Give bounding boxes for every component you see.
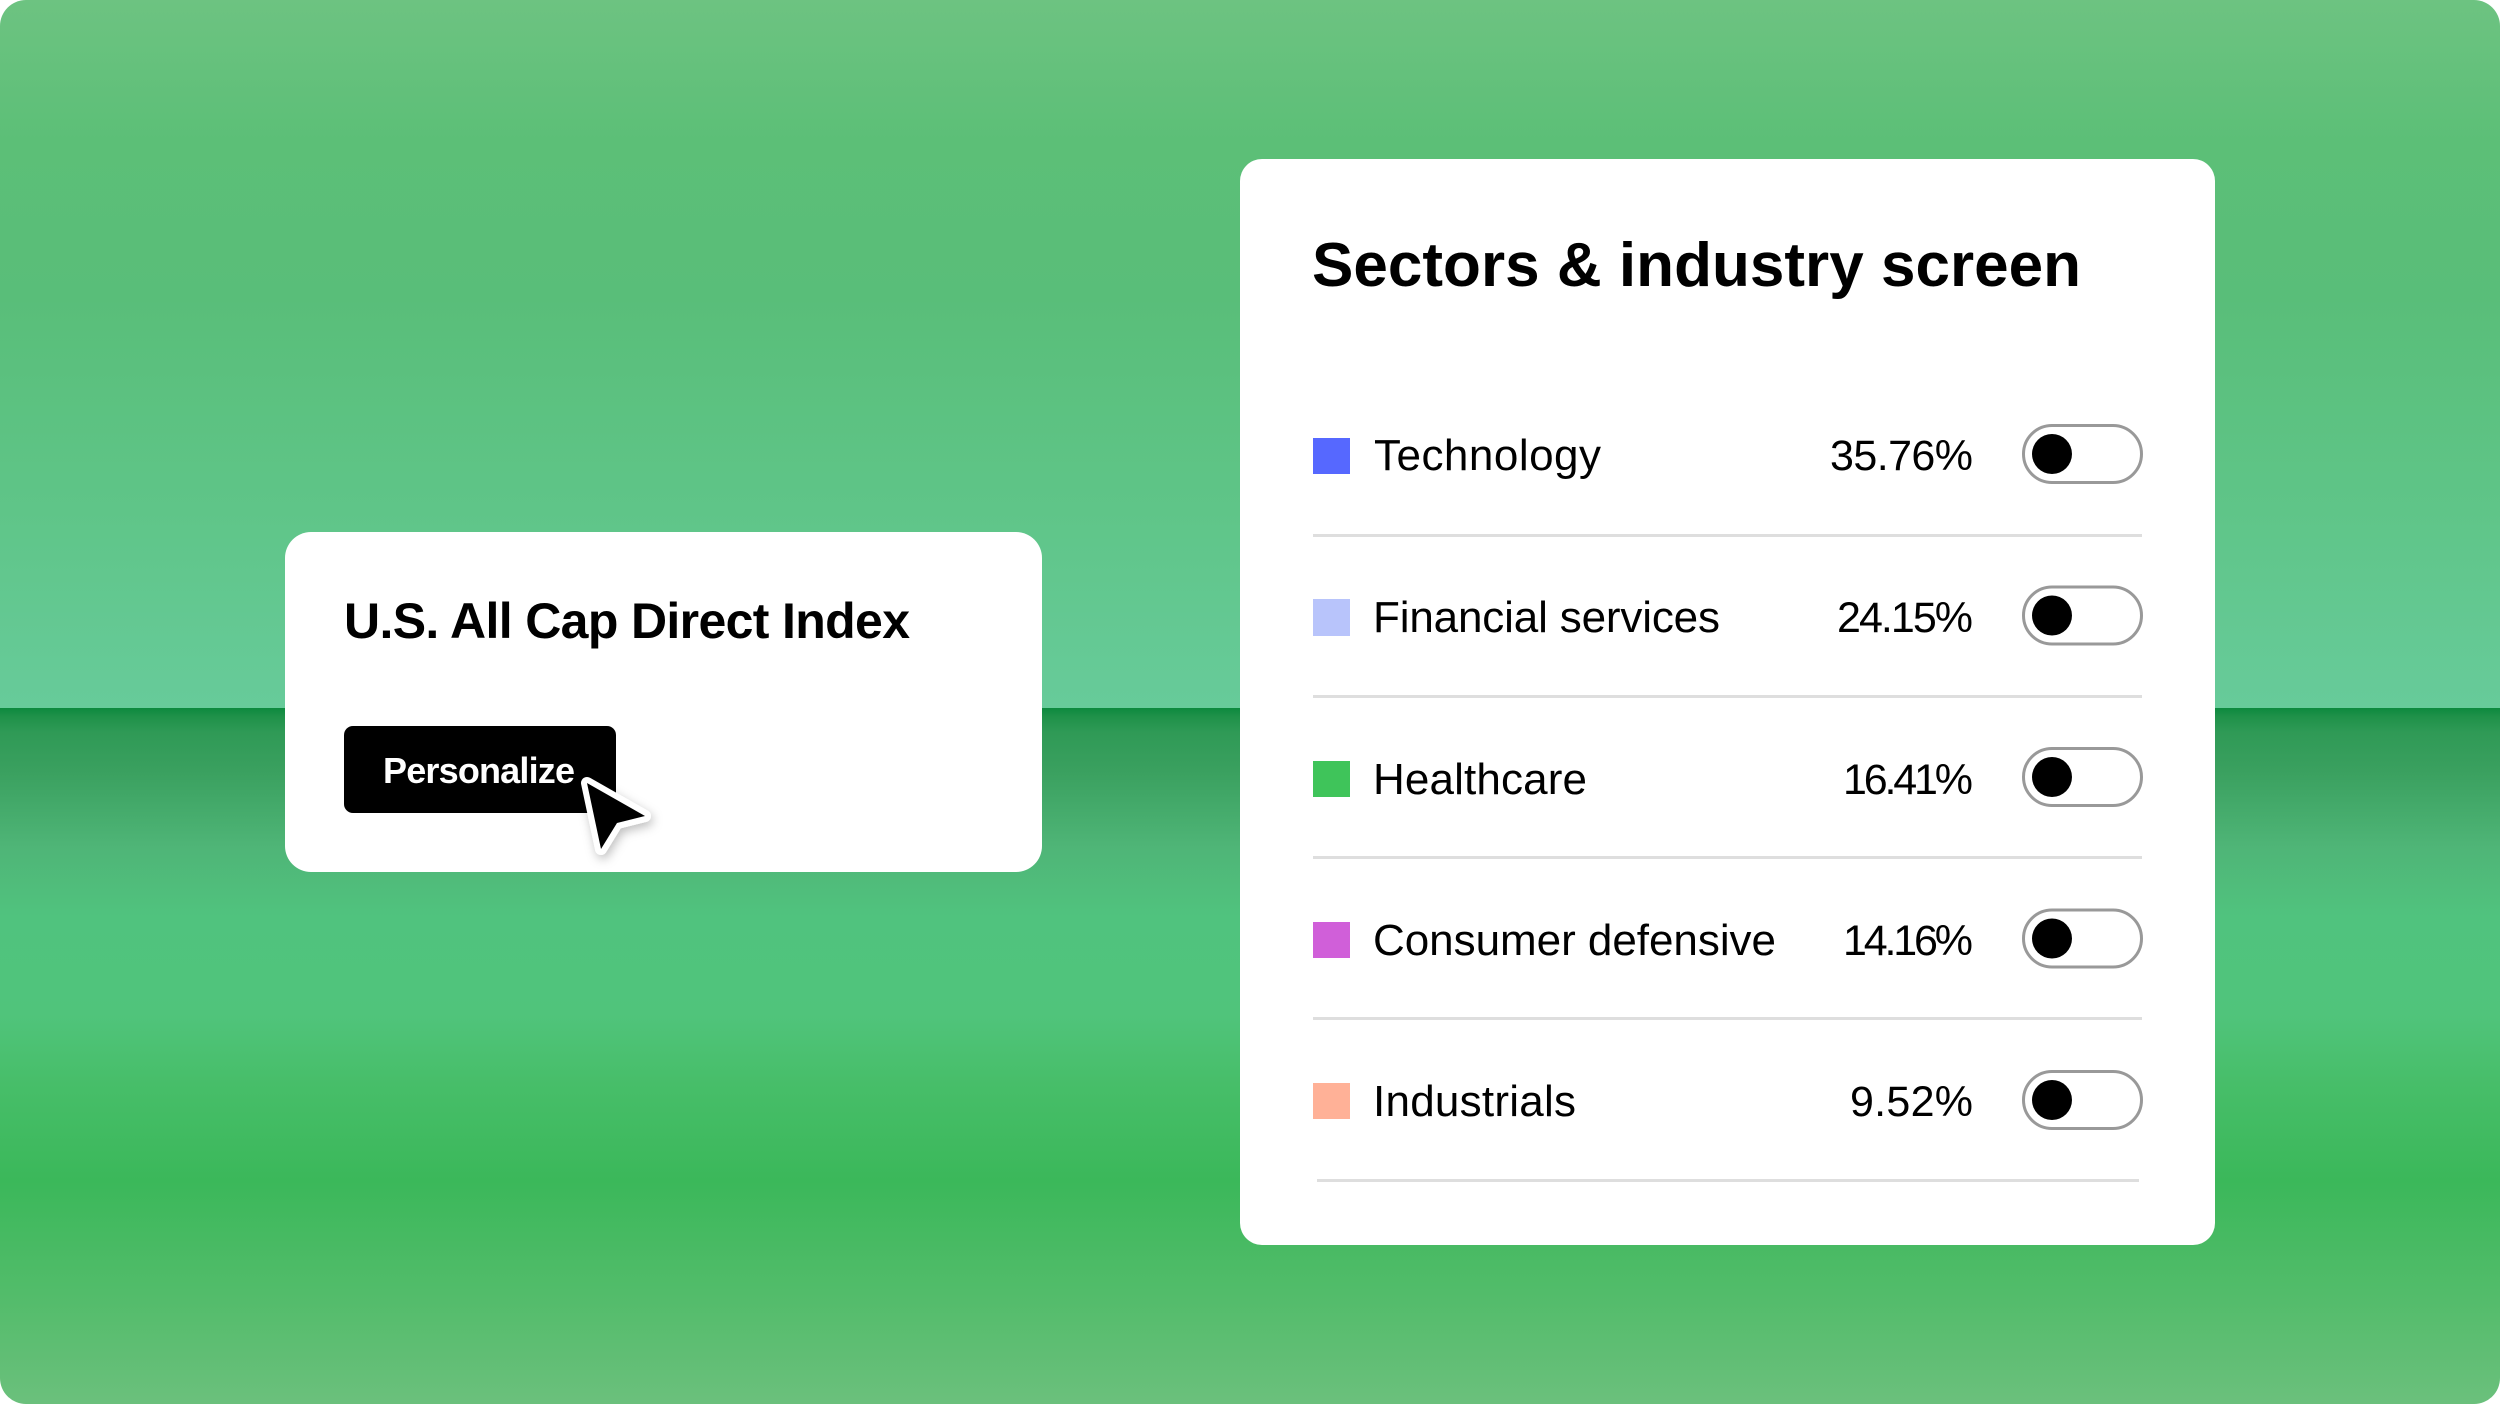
row: Technology: 35.76%	[1830, 432, 1973, 480]
row: Consumer defensive	[1313, 910, 2142, 967]
heading: index name: U.S. All Cap Direct Index	[344, 593, 910, 649]
panel: U.S. All Cap Direct Index	[285, 532, 1042, 872]
row: Technology	[1313, 426, 2142, 482]
icon: mouse cursor	[587, 783, 645, 849]
row: Consumer defensive: Consumer defensive	[1373, 916, 1776, 965]
row: Financial services: 24.15%	[1837, 594, 1973, 642]
row: Financial services	[1313, 587, 2142, 644]
row: Technology: Technology	[1374, 431, 1601, 480]
row: Industrials: 9.52%	[1850, 1078, 1973, 1126]
row: Industrials	[1313, 1072, 2142, 1128]
row: Healthcare: Healthcare	[1373, 755, 1587, 804]
row: Consumer defensive: 14.16%	[1843, 917, 1973, 965]
button: Personalize	[344, 726, 616, 813]
panel: sectors and industry screen	[1240, 159, 2215, 1245]
row: Industrials: Industrials	[1373, 1077, 1576, 1126]
button: Personalize: Personalize	[383, 750, 575, 791]
row: Financial services: Financial services	[1373, 593, 1720, 642]
heading: sectors and industry screen: Sectors & industry screen	[1312, 231, 2081, 300]
row: Healthcare	[1313, 748, 2142, 806]
row: Healthcare: 16.41%	[1843, 756, 1973, 804]
